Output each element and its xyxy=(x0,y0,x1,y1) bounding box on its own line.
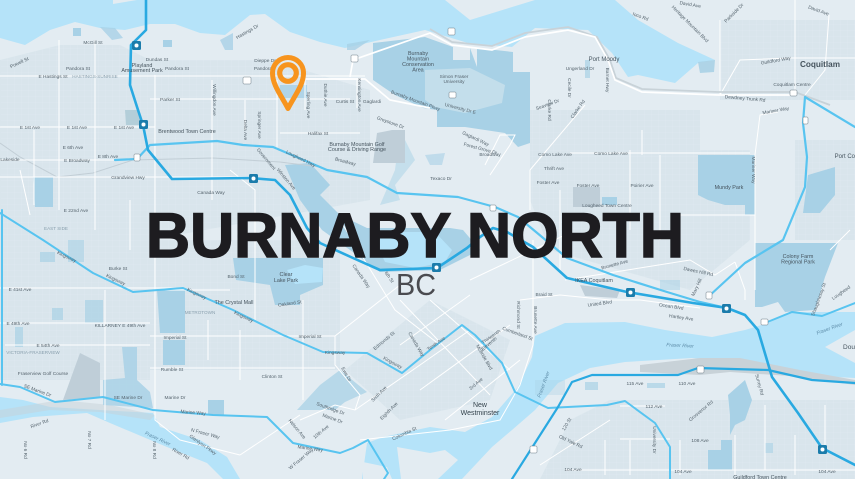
street and place labels: IKEA Coquitlam xyxy=(575,278,613,284)
street and place labels: Lake Park xyxy=(274,278,298,284)
street and place labels: Delta Ave xyxy=(242,120,248,141)
street and place labels: Mariner Way xyxy=(750,156,756,184)
street and place labels: Mary Hill xyxy=(690,278,704,297)
park: Green Timbers pond xyxy=(728,380,752,435)
street and place labels: EAST SIDE xyxy=(44,226,68,231)
street and place labels: Braid St xyxy=(535,292,553,298)
street and place labels: Como Lake Ave xyxy=(538,152,572,158)
street and place labels: Columbia St xyxy=(391,426,418,442)
street and place labels: Burnaby Mountain Golf xyxy=(329,142,385,148)
street and place labels: Kingsway xyxy=(56,250,78,264)
street and place labels: Rumble St xyxy=(161,367,184,373)
street and place labels: Foster Ave xyxy=(537,180,560,186)
street and place labels: Canada Way xyxy=(350,263,372,290)
water: Fraser River north arm xyxy=(0,397,240,479)
street and place labels: Canada Way xyxy=(197,190,225,196)
street and place labels: SE Marine Dr xyxy=(114,395,143,401)
island: Douglas Island xyxy=(825,330,855,363)
street and place labels: Shaughnessy St xyxy=(810,282,828,317)
street and place labels: Mountain xyxy=(407,56,429,62)
street and place labels: E 1st Ave xyxy=(114,125,134,131)
street and place labels: Lougheed Town Centre xyxy=(582,203,632,209)
street and place labels: River Rd xyxy=(171,447,190,462)
street and place labels: Curtis St xyxy=(336,99,355,105)
street and place labels: Seaview Dr xyxy=(535,98,561,112)
street and place labels: Broadway xyxy=(334,156,357,168)
street and place labels: Lougheed Hwy xyxy=(285,149,317,169)
street and place labels: Sperling Ave xyxy=(305,92,311,119)
street and place labels: No 6 Rd xyxy=(22,441,28,459)
street and place labels: Kingsway xyxy=(186,287,208,301)
park: Deer Lake xyxy=(233,258,323,305)
street and place labels: Thirteenth xyxy=(481,328,502,346)
street and place labels: Simon Fraser xyxy=(440,74,469,80)
grey rail and industrial strips xyxy=(0,358,855,420)
street and place labels: Port Moody xyxy=(589,57,619,63)
street and place labels: Marine Way xyxy=(180,409,207,417)
street and place labels: Kensington Ave xyxy=(356,78,362,112)
road: Highway 17 xyxy=(512,368,855,479)
street and place labels: E 8th Ave xyxy=(98,154,119,160)
street and place labels: N Fraser Way xyxy=(190,427,221,441)
street and place labels: Guildford Way xyxy=(760,55,792,67)
street and place labels: Kingsway xyxy=(325,350,346,356)
street and place labels: Grosvenor Rd xyxy=(688,399,715,423)
street and place labels: McBride Blvd xyxy=(474,344,494,372)
subtitle: BC: BC xyxy=(396,267,436,302)
street and place labels: Canada Way xyxy=(406,331,426,358)
street and place labels: Oakland St xyxy=(278,299,303,309)
street and place labels: Lakeside xyxy=(0,157,20,163)
street and place labels: Dawes Hill Rd xyxy=(683,266,714,278)
shield: Highway 1 markers xyxy=(132,41,827,454)
street and place labels: Amusement Park xyxy=(121,68,163,74)
street and place labels: Forest Grove Dr xyxy=(463,142,498,156)
street and place labels: Marine Dr xyxy=(321,413,344,426)
street and place labels: KILLARNEY E 49th Ave xyxy=(95,323,146,329)
shield: maple centres xyxy=(134,44,824,452)
street and place labels: Foster Ave xyxy=(577,183,600,189)
street and place labels: United Blvd xyxy=(587,299,613,309)
park: Byrne Creek xyxy=(297,370,367,410)
street and place labels: E 41st Ave xyxy=(9,287,32,293)
street and place labels: New xyxy=(473,402,488,409)
road: Port Mann approach xyxy=(708,97,855,297)
street and place labels: Poirier Ave xyxy=(630,183,654,189)
street and place labels: Fraser River xyxy=(144,431,171,448)
grey golf courses xyxy=(63,130,620,400)
street and place labels: 112 Ave xyxy=(646,404,663,410)
street and place labels: 6th St xyxy=(383,271,395,285)
street and place labels: Glenlyon Pkwy xyxy=(188,434,218,457)
street and place labels: Fraser River xyxy=(537,370,552,399)
street and place labels: David Ave xyxy=(807,5,830,18)
street and place labels: Clinton St xyxy=(262,374,283,380)
street and place labels: Willingdon Ave xyxy=(211,84,217,116)
street and place labels: HASTINGS-SUNRISE xyxy=(72,74,118,79)
street and place labels: Burke St xyxy=(109,266,128,272)
street and place labels: Area xyxy=(412,68,424,74)
street and place labels: Tenth Ave xyxy=(426,336,447,353)
street and place labels: Winston Ave xyxy=(275,167,297,192)
street and place labels: 10th Ave xyxy=(312,424,331,441)
street and place labels: Clarke Rd xyxy=(546,99,552,121)
street and place labels: Gaglardi Way xyxy=(461,130,490,148)
street and place labels: E 22nd Ave xyxy=(64,208,89,214)
park: Mundy Park xyxy=(698,155,755,215)
street and place labels: Clear xyxy=(280,272,293,278)
street and place labels: Old Yale Rd xyxy=(558,434,584,450)
street and place labels: Hartley Ave xyxy=(669,313,694,323)
street and place labels: Ungerland Dr xyxy=(566,66,595,72)
street and place labels: No 8 Rd xyxy=(151,441,157,459)
street and place labels: Coquitlam Centre xyxy=(773,82,811,88)
street and place labels: 104 Ave xyxy=(818,469,836,475)
golf: Fraserview xyxy=(63,353,100,400)
street and place labels: E 49th Ave xyxy=(6,321,30,327)
park: Central Park xyxy=(157,290,185,333)
road: west boundary xyxy=(1,210,3,385)
golf: Burnaby Mountain xyxy=(373,130,405,163)
street and place labels: Marine Way xyxy=(297,444,324,454)
street and place labels: E Broadway xyxy=(64,158,91,164)
street and place labels: Bond St xyxy=(227,274,245,280)
street and place labels: Colony Farm xyxy=(783,254,814,260)
street and place labels: Clarke Rd xyxy=(570,99,587,120)
street and place labels: Kingsway xyxy=(382,356,403,371)
street and place labels: Ewe Dr xyxy=(339,366,353,383)
street and place labels: E 6th Ave xyxy=(63,145,84,151)
street and place labels: University Dr xyxy=(651,426,657,454)
street and place labels: Halifax St xyxy=(308,131,329,137)
street and place labels: Conservation xyxy=(402,62,434,68)
street and place labels: Imperial St xyxy=(164,335,187,341)
icon: orange location pin xyxy=(272,57,304,108)
grey railway line xyxy=(0,143,320,177)
street and place labels: E 1st Ave xyxy=(67,125,87,131)
street and place labels: The Crystal Mall xyxy=(215,300,253,306)
street and place labels: 120 St xyxy=(561,416,574,432)
street and place labels: Playland xyxy=(132,63,152,69)
street and place labels: Richmond St xyxy=(515,301,521,329)
street and place labels: Dieppe Dr xyxy=(254,58,276,64)
street and place labels: Barnet Hwy xyxy=(604,68,610,93)
park: Burnaby Mountain xyxy=(373,37,530,147)
street and place labels: Heritage Mountain Blvd xyxy=(670,5,710,44)
street and place labels: Fraserview Golf Course xyxy=(18,371,69,377)
street and place labels: River Rd xyxy=(30,418,50,430)
street and place labels: Fraser River xyxy=(816,321,844,337)
Barnet Highway xyxy=(430,27,830,105)
park: Como Creek xyxy=(803,167,835,213)
street and place labels: Kingsway xyxy=(105,273,127,287)
water: Fraser River main channel xyxy=(362,312,855,479)
street and place labels: Springer Ave xyxy=(256,111,262,139)
street and place labels: Dou xyxy=(843,344,855,351)
street and place labels: McGill St xyxy=(83,40,103,46)
street and place labels: E Hastings St xyxy=(38,74,68,80)
street and place labels: W Fraser Way xyxy=(288,447,315,471)
shield: white route markers xyxy=(134,28,808,453)
street and place labels: Texaco Dr xyxy=(430,176,452,182)
street and place labels: Pandora xyxy=(254,66,272,72)
street and place labels: University xyxy=(443,79,465,85)
street and place labels: Coquitlam xyxy=(800,60,840,69)
street and place labels: Como Lake Ave xyxy=(594,151,628,157)
street and place labels: Dundas St xyxy=(146,57,169,63)
street and place labels: Eleventh xyxy=(480,336,499,353)
street and place labels: Brunette Ave xyxy=(601,259,629,271)
street and place labels: Cumberland St xyxy=(501,326,534,343)
street and place labels: Burnaby Mountain Pkwy xyxy=(390,89,441,113)
street and place labels: Ioco Rd xyxy=(632,11,649,23)
street and place labels: David Ave xyxy=(679,0,702,10)
street and place labels: Parkside Dr xyxy=(723,2,746,24)
street and place labels: 115 Ave xyxy=(627,381,644,387)
water: Deer Lake xyxy=(287,265,323,284)
street and place labels: 3rd Ave xyxy=(468,377,485,392)
street and place labels: Course & Driving Range xyxy=(328,147,386,153)
street and place labels: Kingsway xyxy=(233,310,255,324)
street and place labels: Cecile Dr xyxy=(566,78,572,98)
street and place labels: E 54th Ave xyxy=(36,343,60,349)
street and place labels: Government xyxy=(255,147,277,172)
street and place labels: Hastings Dr xyxy=(235,23,260,41)
street and place labels: Eighth Ave xyxy=(379,401,400,421)
street and place labels: METROTOWN xyxy=(185,310,215,315)
street and place labels: Powell St xyxy=(9,56,31,70)
water: Burnaby Lake xyxy=(375,232,452,268)
street and place labels: Broadway xyxy=(479,152,501,158)
street and place labels: Thrift Ave xyxy=(544,166,564,172)
street and place labels: Lougheed xyxy=(831,284,852,302)
street and place labels: 104 Ave xyxy=(564,467,582,473)
street and place labels: Edmonds St xyxy=(372,330,397,352)
street and place labels: SE Marine Dr xyxy=(23,383,52,399)
water: Burrard Inlet and Port Moody Arm xyxy=(0,0,715,83)
park: Robert Burnaby xyxy=(33,177,53,207)
park: Hume xyxy=(125,110,142,125)
street and place labels: Duthie Ave xyxy=(322,83,328,107)
white highway 7A xyxy=(305,30,795,108)
street and place labels: Marine Dr xyxy=(164,395,186,401)
street and place labels: Southridge Dr xyxy=(315,401,346,417)
street and place labels: Westminster xyxy=(461,410,500,417)
street and place labels: No 7 Rd xyxy=(86,431,92,449)
street and place labels: Brunette Ave xyxy=(532,306,538,334)
street and place labels: University Dr E xyxy=(444,102,476,116)
road: Lougheed Highway xyxy=(115,141,722,307)
street and place labels: Gaglardi xyxy=(363,99,381,105)
street and place labels: Ocean Blvd xyxy=(658,302,684,312)
street and place labels: 104 Ave xyxy=(674,469,692,475)
street and place labels: 108 Ave xyxy=(691,438,709,444)
highway shields xyxy=(132,28,827,454)
land: Queensborough xyxy=(363,447,458,479)
street and place labels: Regional Park xyxy=(781,260,815,266)
street and place labels: Grandview Hwy xyxy=(111,175,145,181)
street and place labels: Mariner Way xyxy=(762,106,790,116)
road: Marine Way xyxy=(0,384,388,479)
street and place labels: Imperial St xyxy=(299,334,322,340)
title: Burnaby North: BURNABY NORTH xyxy=(146,201,684,271)
street and place labels: 110 Ave xyxy=(679,381,696,387)
street and place labels: Port Co xyxy=(835,154,855,160)
street and place labels: Dewdney Trunk Rd xyxy=(725,94,766,104)
street and place labels: VICTORIA-FRASERVIEW xyxy=(6,350,60,355)
street and place labels: Sixth Ave xyxy=(370,385,389,403)
road: Kingsway xyxy=(0,213,670,479)
park: Everett Crowley xyxy=(103,347,153,408)
street and place labels: Parker St xyxy=(160,97,181,103)
street and place labels: Pandora St xyxy=(165,66,190,72)
street and place labels: Nelson Ave xyxy=(287,418,307,441)
street and place labels: Mundy Park xyxy=(715,185,744,191)
road: east connector xyxy=(765,303,855,323)
street and place labels: Brentwood Town Centre xyxy=(158,129,216,135)
street and place labels: Burnaby xyxy=(408,51,428,57)
street and place labels: Greystone Dr xyxy=(376,115,405,131)
park: Burnaby Lake xyxy=(285,163,480,272)
rail yard xyxy=(573,187,600,207)
park: Simon Fraser lawn xyxy=(425,68,505,113)
street and place labels: E 1st Ave xyxy=(20,125,40,131)
street and place labels: Pandora St xyxy=(66,66,91,72)
park: Colony Farm xyxy=(755,243,838,312)
street and place labels: Fraser River xyxy=(666,342,694,350)
street and place labels: Surrey Rd xyxy=(753,374,765,396)
